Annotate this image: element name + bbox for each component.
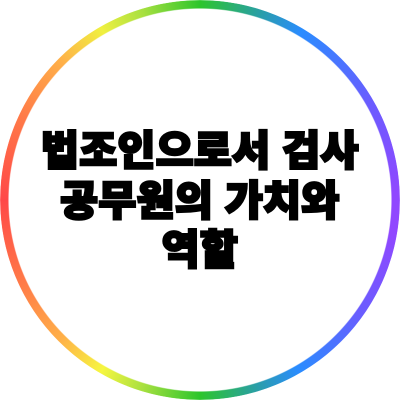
title [41, 128, 359, 273]
title: 역할 [162, 227, 238, 273]
title: 공무원의 가치와 [60, 178, 340, 224]
title: 법조인으로서 검사 [41, 128, 359, 174]
